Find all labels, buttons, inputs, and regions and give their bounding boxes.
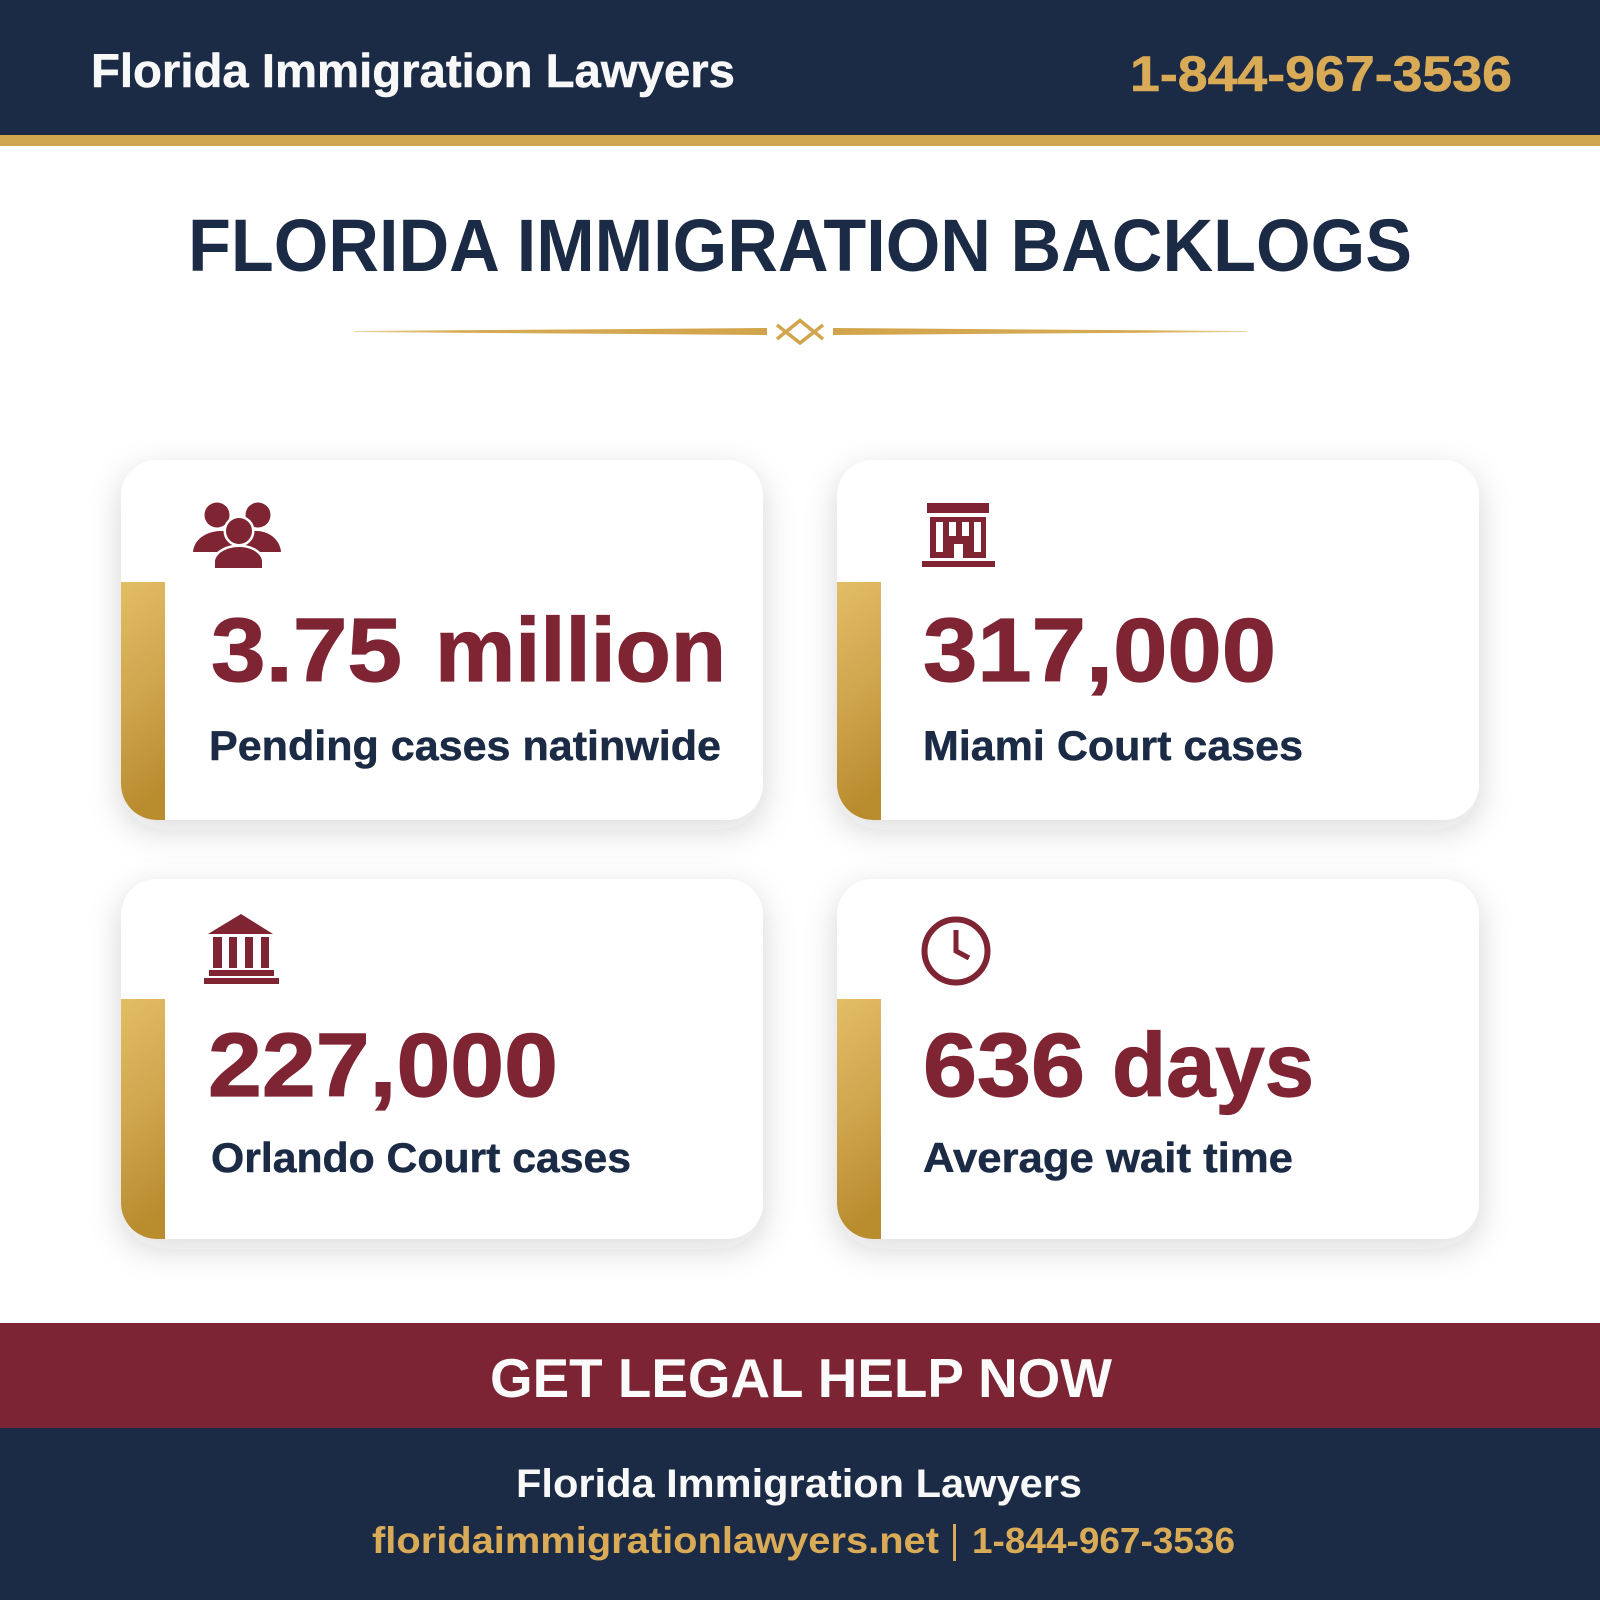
footer — [0, 1428, 1600, 1600]
stat label: Average wait time — [923, 1134, 1293, 1181]
gold accent bar — [837, 999, 881, 1239]
icon: columned courthouse — [204, 914, 279, 984]
stat value: 636 — [923, 1016, 1085, 1116]
panel: pending cases nationwide — [121, 460, 763, 820]
ornamental divider — [354, 320, 1247, 343]
stat value — [211, 601, 726, 701]
stat value: million — [435, 601, 726, 701]
stat value: 3.75 — [211, 601, 402, 701]
panel: Orlando Court cases — [121, 879, 763, 1239]
title: FLORIDA IMMIGRATION BACKLOGS — [188, 204, 1412, 287]
stat value: 227,000 — [208, 1016, 558, 1116]
gold accent bar — [121, 582, 165, 820]
icon: people group — [193, 502, 281, 568]
footer website: floridaimmigrationlawyers.net — [372, 1520, 939, 1561]
stat label: Pending cases natinwide — [209, 722, 721, 769]
panel: average wait time — [837, 879, 1479, 1239]
header phone number: 1-844-967-3536 — [1130, 46, 1512, 102]
call to action text: GET LEGAL HELP NOW — [490, 1347, 1112, 1409]
footer phone number: 1-844-967-3536 — [972, 1520, 1235, 1561]
header firm name: Florida Immigration Lawyers — [91, 44, 735, 97]
icon: courthouse building — [922, 503, 995, 567]
stat value: 317,000 — [923, 601, 1276, 701]
footer separator — [953, 1524, 956, 1561]
footer firm name: Florida Immigration Lawyers — [516, 1462, 1082, 1506]
gold accent bar — [121, 999, 165, 1239]
gold accent bar — [837, 582, 881, 820]
panel: Miami Court cases — [837, 460, 1479, 820]
icon: clock — [924, 920, 988, 982]
call to action band — [0, 1323, 1600, 1428]
stat value — [923, 1016, 1314, 1116]
stat value: days — [1112, 1016, 1314, 1116]
stat label: Miami Court cases — [923, 722, 1303, 769]
header bar — [0, 0, 1600, 146]
stat label: Orlando Court cases — [211, 1134, 631, 1181]
